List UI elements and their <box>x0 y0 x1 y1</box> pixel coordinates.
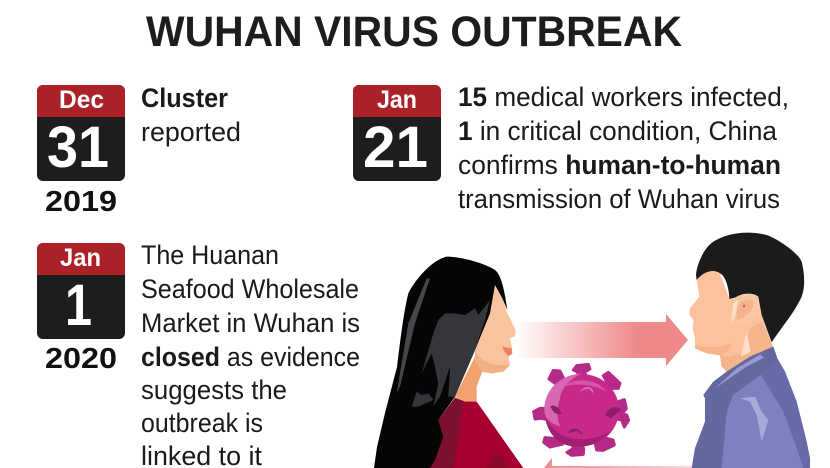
text: human-to-human transmission: 15 medical workers infected, <box>458 82 789 112</box>
arrow: man to woman <box>544 458 692 468</box>
text: cluster reported <box>141 83 241 147</box>
calendar: Jan 21: Jan <box>377 86 417 114</box>
calendar: Jan 21: 21 <box>363 115 428 180</box>
calendar: Jan 1 2020: 2020 <box>45 343 117 375</box>
woman <box>374 257 523 468</box>
text: human-to-human transmission <box>458 82 789 214</box>
title: WUHAN VIRUS OUTBREAK <box>146 8 682 56</box>
calendar: Jan 1 2020 <box>37 243 125 375</box>
arrow: woman to man <box>515 314 688 366</box>
text: market closed: suggests the <box>141 375 287 405</box>
text: market closed: outbreak is <box>141 408 263 438</box>
calendar: Jan 21 <box>353 85 441 181</box>
text: market closed: Seafood Wholesale <box>141 274 359 304</box>
calendar: Jan 1 2020: 1 <box>65 273 92 338</box>
calendar: Dec 31 2019: 31 <box>47 115 109 180</box>
man <box>689 233 810 468</box>
text: cluster reported: reported <box>141 117 241 147</box>
text: cluster reported: Cluster <box>141 83 228 113</box>
text: market closed <box>141 240 360 468</box>
illustration: two people and virus <box>374 233 810 468</box>
calendar: Dec 31 2019: 2019 <box>45 186 117 218</box>
text: human-to-human transmission: transmission of Wuhan virus <box>458 184 780 214</box>
text: market closed: The Huanan <box>141 240 279 270</box>
calendar: Dec 31 2019: Dec <box>59 86 104 114</box>
calendar: Jan 1 2020: Jan <box>60 244 101 272</box>
text: market closed: closed as evidence <box>141 342 360 372</box>
virus <box>534 364 629 455</box>
text: human-to-human transmission: 1 in critical condition, China <box>458 116 778 146</box>
calendar: Dec 31 2019 <box>37 85 125 218</box>
text: market closed: Market in Wuhan is <box>141 308 360 338</box>
text: human-to-human transmission: confirms human-to-human <box>458 150 781 180</box>
